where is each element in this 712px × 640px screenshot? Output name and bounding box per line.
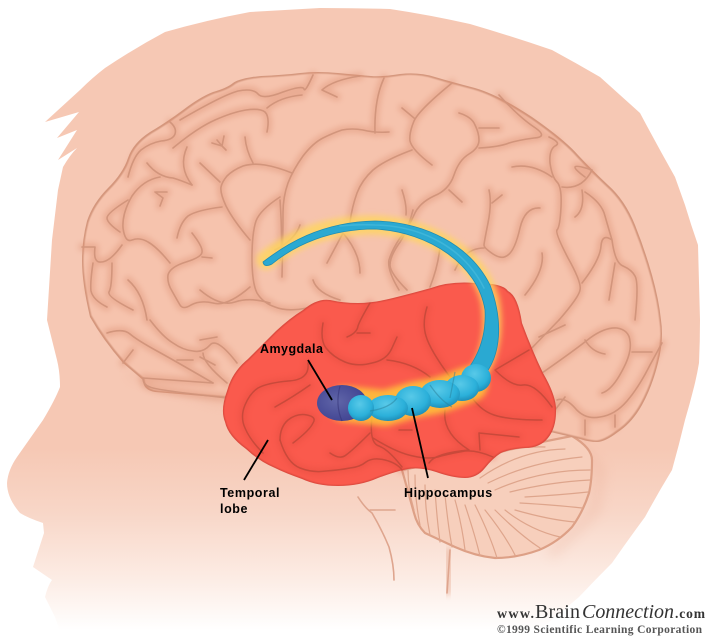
website credit: Connection: [582, 601, 674, 623]
shading under brain: [130, 372, 600, 555]
temporal lobe highlight: [223, 283, 556, 486]
pointer: temporal lobe: [244, 440, 268, 480]
label: Temporal lobe: Temporal: [220, 486, 280, 500]
label: Amygdala: Amygdala: [260, 342, 324, 356]
website credit: Brain: [535, 601, 580, 623]
pointer: amygdala: [308, 360, 332, 400]
website credit: [497, 601, 706, 623]
copyright line: ©1999 Scientific Learning Corporation: [497, 624, 703, 636]
label: Hippocampus: Hippocampus: [404, 486, 493, 500]
hippocampus: [263, 221, 499, 421]
label: Temporal lobe: lobe: [220, 502, 248, 516]
brain cerebrum: [82, 72, 662, 442]
amygdala: [317, 385, 367, 421]
brain stem: [358, 497, 450, 595]
yellow glow around hippocampus: [266, 225, 492, 408]
website credit: .com: [675, 606, 706, 621]
pointer: hippocampus: [412, 408, 428, 478]
website credit: www.: [497, 607, 534, 622]
cerebellum: [402, 436, 592, 558]
